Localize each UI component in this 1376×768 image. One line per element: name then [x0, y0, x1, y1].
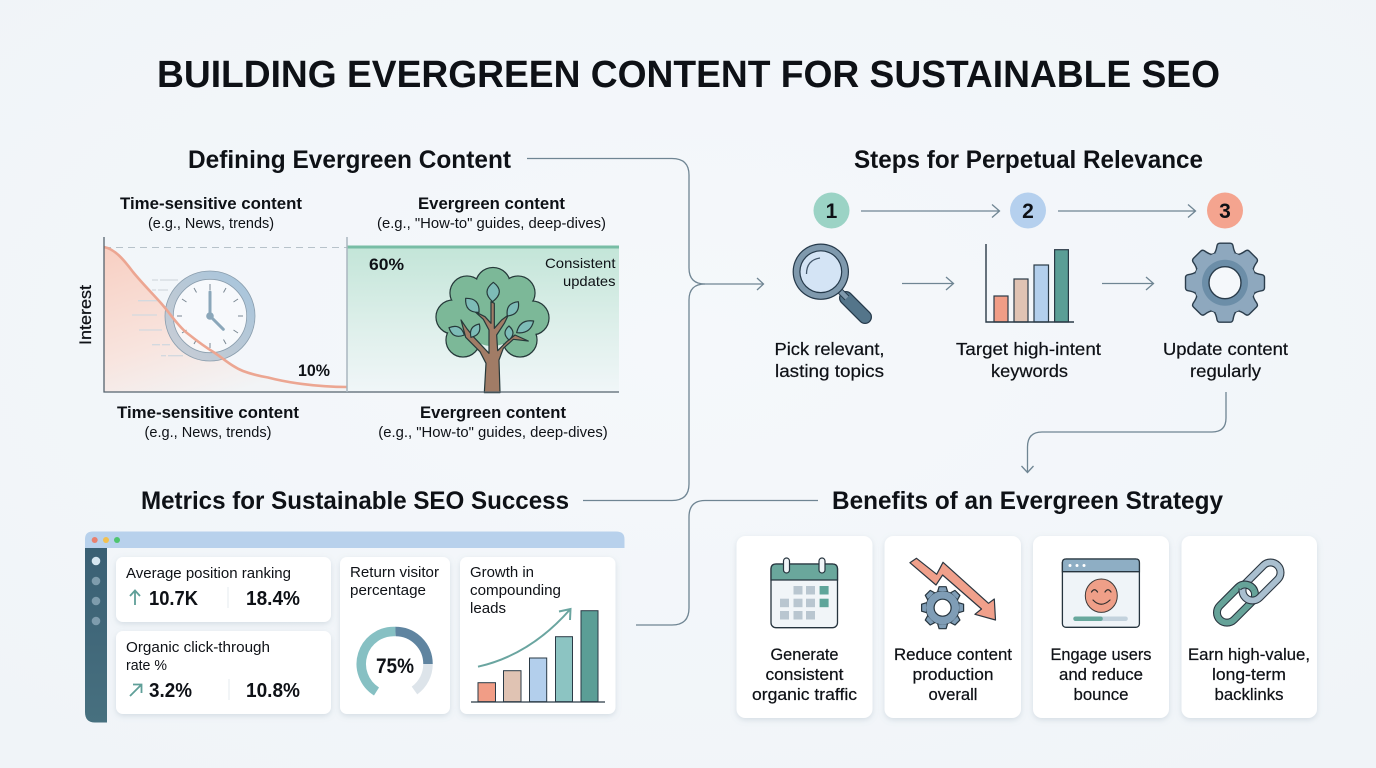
trend arrow: [478, 609, 570, 667]
column header: time-sensitive: (e.g., News, trends): [148, 216, 274, 232]
benefit card: reduce production: Reduce content: [894, 646, 1012, 664]
caption: time-sensitive: (e.g., News, trends): [144, 425, 272, 441]
title bar: [85, 532, 624, 548]
arrow: icon 2 to icon 3: [1102, 277, 1154, 290]
donut chart: [361, 631, 428, 692]
benefit card: backlinks: long-term: [1212, 666, 1286, 684]
time-sensitive curve: [104, 247, 347, 387]
sidebar: [85, 545, 107, 722]
benefit card: reduce production: [884, 536, 1021, 718]
icon: bar chart: [986, 244, 1074, 322]
benefit card: organic traffic: Generate: [770, 646, 838, 664]
step badge 2: 2: [1022, 200, 1034, 223]
card: return visitor percentage: Return visitor: [350, 565, 439, 581]
heading: benefits: Benefits of an Evergreen Strategy: [832, 487, 1223, 515]
caption: evergreen: Evergreen content: [420, 404, 567, 422]
time-sensitive area: [104, 247, 347, 392]
panel: metrics for sustainable seo success: [85, 487, 624, 722]
card: return visitor percentage: percentage: [350, 583, 426, 599]
value: 60%: 60%: [369, 256, 404, 274]
benefit card: engage users: and reduce: [1059, 666, 1143, 684]
bar chart: leads: [471, 611, 605, 702]
step label 1: [774, 339, 884, 381]
card: average position ranking: [116, 557, 331, 622]
card: organic click-through rate: 10.8%: [246, 680, 300, 702]
icon: clock: [132, 271, 255, 361]
chart: interest over time: [77, 237, 619, 393]
connector: steps to benefits: [1022, 392, 1226, 472]
step label 2: Target high-intent: [956, 339, 1101, 359]
arrow: 2 to 3: [1058, 204, 1196, 218]
caption: evergreen: (e.g., "How-to" guides, deep-dives): [378, 425, 608, 441]
step badge 2: [1010, 192, 1046, 228]
step label 2: [956, 339, 1101, 381]
card: growth in compounding leads: Growth in: [470, 565, 534, 581]
card: organic click-through rate: rate %: [126, 658, 167, 674]
step badge 3: 3: [1219, 200, 1231, 223]
step badge 1: 1: [826, 200, 838, 223]
column header: evergreen: Evergreen content: [418, 195, 566, 213]
benefit card: backlinks: [1182, 536, 1317, 718]
icon: browser with smiley: [1062, 559, 1139, 627]
panel: defining evergreen content: [77, 146, 619, 441]
card: average position ranking: Average position ranking: [126, 566, 291, 582]
card: return visitor percentage: [340, 557, 450, 714]
arrow: 1 to 2: [861, 204, 1000, 218]
benefit card: backlinks: Earn high-value,: [1188, 646, 1310, 664]
card: return visitor percentage: 75%: [376, 655, 414, 678]
card: average position ranking: 10.7K: [149, 588, 199, 610]
title: BUILDING EVERGREEN CONTENT FOR SUSTAINABLE SEO: [157, 54, 1220, 96]
column header: time-sensitive: [120, 195, 303, 232]
icon: chain link: [1213, 558, 1285, 627]
step badge 1: [814, 192, 850, 228]
benefit card: engage users: bounce: [1074, 686, 1128, 704]
icon: gear: [922, 587, 964, 629]
icon: diagonal arrow: [130, 684, 142, 696]
value: 10%: 10%: [298, 362, 330, 380]
benefit card: organic traffic: organic traffic: [752, 686, 857, 704]
benefit card: backlinks: backlinks: [1214, 686, 1284, 704]
step label 1: Pick relevant,: [774, 339, 884, 359]
benefit card: reduce production: overall: [928, 686, 978, 704]
step label 3: regularly: [1190, 361, 1261, 381]
column header: evergreen: [377, 195, 606, 232]
card: growth in compounding leads: [460, 557, 616, 714]
icon: gear: [1186, 243, 1264, 322]
caption: time-sensitive: [117, 404, 300, 441]
step badge 3: [1207, 192, 1243, 228]
column header: time-sensitive: Time-sensitive content: [120, 195, 303, 213]
benefit card: engage users: Engage users: [1050, 646, 1152, 664]
caption: evergreen: [378, 404, 608, 441]
card: organic click-through rate: Organic click-through: [126, 640, 270, 656]
sidebar icons: [92, 557, 100, 625]
arrow: icon 1 to icon 2: [902, 277, 954, 290]
evergreen line: [347, 246, 619, 248]
evergreen area: [347, 247, 619, 392]
annotation: consistent updates: [545, 255, 616, 289]
dashboard window: [85, 532, 624, 722]
heading: steps: Steps for Perpetual Relevance: [854, 146, 1203, 174]
dashed peak line: [104, 246, 347, 248]
benefit card: organic traffic: consistent: [766, 666, 844, 684]
card: growth in compounding leads: compounding: [470, 583, 561, 599]
axis label: interest: Interest: [77, 285, 95, 345]
divider: [346, 237, 348, 392]
step label 1: lasting topics: [775, 361, 884, 381]
benefit card: organic traffic: [736, 536, 872, 718]
card: growth in compounding leads: leads: [470, 601, 506, 617]
icon: tree: [436, 268, 549, 393]
icon: magnifier: [793, 244, 865, 317]
card: organic click-through rate: [116, 631, 331, 714]
heading: defining evergreen content: Defining Evergreen Content: [188, 146, 512, 174]
window controls: [92, 537, 120, 543]
axes: [104, 237, 619, 392]
annotation: consistent updates: updates: [563, 273, 616, 289]
connector: defining and metrics to steps: [527, 158, 764, 500]
card: organic click-through rate: 3.2%: [149, 680, 192, 702]
icon: downward arrow: [910, 558, 996, 620]
step label 3: Update content: [1163, 339, 1288, 359]
panel: benefits of an evergreen strategy: [736, 487, 1317, 718]
icon: calendar: [771, 558, 838, 628]
step label 2: keywords: [991, 361, 1068, 381]
caption: time-sensitive: Time-sensitive content: [117, 404, 300, 422]
card: average position ranking: 18.4%: [246, 588, 300, 610]
column header: evergreen: (e.g., "How-to" guides, deep-dives): [377, 216, 606, 232]
panel: steps for perpetual relevance: [774, 146, 1288, 381]
benefit card: engage users: [1033, 536, 1169, 718]
annotation: consistent updates: Consistent: [545, 255, 616, 271]
icon: up arrow: [130, 590, 140, 605]
step label 3: [1163, 339, 1288, 381]
connector: dashboard to benefits: [636, 500, 818, 625]
heading: metrics: Metrics for Sustainable SEO Success: [141, 487, 569, 515]
benefit card: reduce production: production: [912, 666, 994, 684]
